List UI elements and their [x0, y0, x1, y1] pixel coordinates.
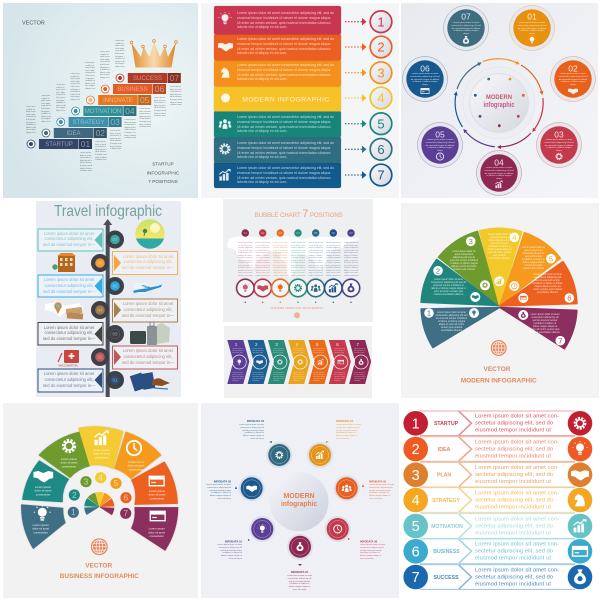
infodata labels: INFODATA 01 [225, 540, 242, 544]
row labels: BUSINESS [433, 549, 460, 555]
illustration: passports [130, 372, 170, 391]
wedge icon badges [469, 276, 528, 320]
wedge text: Lorem ipsum dolor sit amet consectetur adipiscing elit sed do eiusmod tempor incididunt ut labore et dolore magna aliqua ut enim ad minim veniam quis nostrud exercitation ullamco [436, 311, 467, 332]
numbered circles 1 to 7: 7 [377, 168, 385, 183]
small arrow marks [235, 441, 364, 566]
row lorem text: sectetur adipiscing elit, sed do [475, 549, 553, 555]
disc numbers: 03 [554, 130, 564, 140]
segment text: Lorem ipsum [35, 485, 51, 489]
caption: modern template infographic: MODERN TEMPLATE INFOGRAPHIC [270, 306, 324, 310]
segment text: dolor sit amet [128, 464, 145, 468]
chevron lorem text [232, 348, 366, 382]
chevron lorem text: Lorem ipsum dolor sit amet consectetur adipiscing elit sed do eiusmod [293, 372, 305, 382]
segment text: consectetur [94, 455, 109, 459]
segment text: dolor sit amet [32, 527, 49, 531]
panel: arc business infographic [3, 403, 198, 598]
top number bubbles: 06 [332, 231, 335, 235]
chevron numbers: 7 [357, 342, 360, 347]
top number bubbles [242, 229, 355, 237]
disc numbers: 02 [568, 64, 578, 74]
panel: numbered startup-to-success list [400, 403, 600, 598]
number badges: 7 [558, 336, 562, 345]
wedge text: Lorem ipsum dolor sit amet consectetur adipiscing elit sed do eiusmod tempor incididunt ut labore et dolore magna aliqua ut enim ad minim veniam quis nostrud [450, 250, 478, 271]
number bubbles: 1 [71, 508, 76, 517]
disc text: Lorem ipsum dolor sit amet consectetur adipiscing elit sed do eiusmod tempor incididunt ut labore et dolore magna aliqua [544, 139, 574, 152]
disc text: Lorem ipsum dolor sit amet consectetur adipiscing elit sed do eiusmod tempor incididunt ut labore et dolore magna aliqua [410, 73, 440, 86]
band text [237, 11, 335, 186]
panel: travel infographic timeline [36, 201, 181, 397]
heading: modern infographic: MODERN INFOGRAPHIC [242, 96, 329, 104]
heading: bubble chart: BUBBLE CHART 7 POSITIONS [255, 208, 343, 220]
dotted arrows [345, 18, 366, 179]
caption: vector modern infographic [461, 366, 537, 384]
chevron lorem text: Lorem ipsum dolor sit amet consectetur adip [313, 348, 325, 354]
arc segments 1 to 7 [22, 427, 178, 550]
chevron numbers: 2 [255, 342, 258, 347]
disc numbers: 06 [420, 64, 430, 74]
box text [41, 230, 176, 390]
chevron numbers: 6 [336, 342, 339, 347]
band text: Lorem ipsum dolor sit amet consectetur adipiscing elit, sed do eiusmod tempor incididunt ut labore et dolore magna aliqua. Ut enim ad minim veniam, quis nostrud exercitation ullamco laboris nisi ut aliquip ex ea com- [237, 166, 334, 184]
top number bubbles: 07 [349, 231, 353, 235]
box text: Lorem ipsum dolor sit amet consectetur adipiscing elit, sed do eiusmod tempor in— [122, 348, 174, 365]
segment text: dolor sit amet [35, 489, 52, 493]
chevron lorem text: Lorem ipsum dolor sit amet consectetur adip [334, 348, 345, 354]
centre sphere: infographic [281, 499, 317, 508]
stair steps 01 to 07: 03 [110, 117, 120, 127]
numbered circles 1 to 7: 6 [377, 142, 385, 157]
segment text: consectetur [129, 467, 143, 471]
top number bubbles: 05 [314, 231, 318, 235]
stair steps 01 to 07: 01 [81, 139, 90, 149]
caption: startup infographic 7 positions: INFOGRAPHIC [147, 170, 180, 176]
centre sphere [270, 472, 328, 531]
colour bands [214, 6, 341, 188]
illustration: map and tickets [45, 302, 83, 320]
numbered circles 1 to 7: 1 [377, 14, 385, 29]
disc numbers: 05 [435, 130, 445, 140]
icon: golden crown [130, 40, 177, 68]
illustration: vaccination kit [58, 347, 79, 368]
panel: fan diagram modern infographic [401, 203, 599, 398]
band text: Lorem ipsum dolor sit amet consectetur adipiscing elit, sed do eiusmod tempor incididunt ut labore et dolore magna aliqua. Ut enim ad minim veniam, quis nostrud exercitation ullamco laboris nisi ut aliquip ex ea com- [237, 141, 334, 159]
left number circles: 4 [412, 493, 420, 509]
segment text: dolor sit amet [93, 452, 110, 456]
row lorem text: eiusmod tempor incididunt ut [475, 479, 551, 485]
infodata text [205, 424, 395, 592]
stair steps 01 to 07: BUSINESS [117, 87, 148, 93]
row labels: STRATEGY [432, 498, 460, 504]
number badges: 2 [436, 266, 440, 275]
segment text: consectetur [36, 492, 50, 496]
illustration: airplane [133, 283, 162, 293]
heading: vector: VECTOR [22, 20, 45, 26]
disc numbers [420, 12, 578, 168]
left number circles: 1 [412, 416, 420, 432]
wedge text: Lorem ipsum dolor sit amet consectetur adipiscing elit sed do eiusmod tempor incididunt ut labore et dolore magna aliqua ut enim ad minim veniam quis nostrud [522, 246, 545, 270]
step icons [27, 74, 124, 148]
number badges: 1 [427, 309, 431, 318]
chevron lorem text: Lorem ipsum dolor sit amet consectetur adipiscing elit sed do eiusmod [334, 372, 345, 382]
chevron lorem text: Lorem ipsum dolor sit amet consectetur adipiscing elit sed do eiusmod [232, 372, 244, 382]
row outlines [420, 411, 575, 589]
infodata text: Lorem ipsum dolor sit amet consectetur adipiscing elit sed do eiusmod tempor incididunt ut labore et dolore magna aliqua ut enim ad minim [360, 544, 385, 560]
row lorem text: Lorem ipsum dolor sit amet con- [475, 414, 559, 420]
segment text: Lorem ipsum [61, 457, 77, 461]
chevron lorem text: Lorem ipsum dolor sit amet consectetur adipiscing elit sed do eiusmod [252, 372, 264, 382]
disc text: Lorem ipsum dolor sit amet consectetur adipiscing elit sed do eiusmod tempor incididunt ut labore et dolore magna aliqua [517, 22, 547, 35]
infodata labels: INFODATA 03 [247, 419, 264, 423]
timeline nodes 07 to 01: 05 [112, 284, 118, 288]
left number circles [403, 411, 428, 589]
segment text: dolor sit amet [148, 530, 165, 534]
row labels: IDEA [438, 447, 450, 453]
centre plate: infographic [484, 102, 515, 109]
row lorem text: sectetur adipiscing elit, sed do [475, 523, 553, 529]
mini fan chart [84, 492, 114, 515]
timeline nodes 07 to 01: 01 [112, 378, 118, 382]
caption: vector business infographic [60, 562, 139, 580]
row lorem text: eiusmod tempor incididunt ut [475, 428, 551, 434]
illustration: hotel [52, 253, 76, 272]
caption: vector business infographic: BUSINESS INFOGRAPHIC [60, 573, 139, 580]
chevron lorem text: Lorem ipsum dolor sit amet consectetur adip [252, 348, 264, 354]
row lorem text: Lorem ipsum dolor sit amet con- [475, 567, 559, 573]
stair steps 01 to 07: MOTIVATION [85, 109, 121, 115]
timeline nodes 07 to 01: 06 [97, 260, 103, 266]
chevron numbers: 1 [235, 342, 238, 347]
panel: orbit infographic with infodata labels [201, 403, 399, 598]
number bubbles: 6 [124, 494, 129, 503]
row lorem text [475, 414, 559, 587]
number bubbles: 7 [123, 509, 128, 518]
chevron lorem text: Lorem ipsum dolor sit amet consectetur adipiscing elit sed do eiusmod [273, 372, 284, 382]
row lorem text: eiusmod tempor incididunt ut [475, 504, 551, 510]
stair steps 01 to 07: STARTUP [45, 142, 73, 148]
row lorem text: sectetur adipiscing elit, sed do [475, 421, 553, 427]
band text: Lorem ipsum dolor sit amet consectetur adipiscing elit, sed do eiusmod tempor incididunt ut labore et dolore magna aliqua. Ut enim ad minim veniam, quis nostrud exercitation ullamco laboris nisi ut aliquip ex ea com- [237, 11, 334, 29]
illustration: luggage [130, 322, 170, 345]
panel: bubble chart 7 positions [223, 199, 373, 322]
orbit discs [239, 442, 360, 560]
row lorem text: eiusmod tempor incididunt ut [475, 581, 551, 587]
segment text: consectetur [150, 496, 164, 500]
text columns [238, 242, 358, 276]
timeline nodes 07 to 01: 04 [97, 308, 103, 312]
chevron lorem text: Lorem ipsum dolor sit amet consectetur adip [232, 348, 243, 354]
disc icons [246, 451, 352, 551]
bubble icons [241, 283, 354, 292]
segment text: Lorem ipsum [128, 460, 144, 464]
disc numbers: 04 [494, 158, 504, 168]
segment text: Lorem ipsum [94, 448, 110, 452]
stair steps 01 to 07: STRATEGY [73, 120, 104, 126]
numbered circles 1 to 7 [370, 11, 392, 186]
number badges: 3 [469, 237, 473, 246]
segment text: Lorem ipsum [149, 489, 165, 493]
row lorem text: eiusmod tempor incididunt ut [475, 530, 551, 536]
number badges: 4 [512, 233, 516, 242]
row lorem text: Lorem ipsum dolor sit amet con- [475, 439, 559, 445]
fan wedges 1 to 7 [421, 228, 577, 349]
infodata labels: INFODATA 06 [360, 540, 378, 544]
band text: Lorem ipsum dolor sit amet consectetur adipiscing elit, sed do eiusmod tempor incididunt ut labore et dolore magna aliqua. Ut enim ad minim veniam, quis nostrud exercitation ullamco laboris nisi ut aliquip ex ea com- [237, 63, 334, 81]
segment text: dolor sit amet [61, 461, 78, 465]
disc text: Lorem ipsum dolor sit amet consectetur adipiscing elit sed do eiusmod tempor incididunt ut labore et dolore magna aliqua [425, 139, 455, 152]
segment text: consectetur [149, 534, 164, 538]
centre plate: MODERN [486, 94, 512, 101]
top number bubbles: 01 [244, 231, 247, 235]
left number circles: 2 [412, 442, 420, 458]
world map [227, 236, 360, 278]
number bubbles: 2 [72, 491, 77, 500]
left number circles: 3 [412, 468, 420, 484]
row lorem text: sectetur adipiscing elit, sed do [475, 446, 553, 452]
illustration: island sun [135, 219, 165, 249]
timeline nodes 07 to 01: 02 [97, 354, 103, 360]
stair steps 01 to 07: IDEA [66, 131, 81, 137]
row labels: PLAN [437, 473, 451, 479]
timeline nodes 07 to 01: 07 [112, 237, 118, 242]
chevron rings and icons [232, 355, 368, 369]
panel: modern infographic stacked bands [201, 3, 399, 198]
band text: Lorem ipsum dolor sit amet consectetur adipiscing elit, sed do eiusmod tempor incididunt ut labore et dolore magna aliqua. Ut enim ad minim veniam, quis nostrud exercitation ullamco laboris nisi ut aliquip ex ea com- [237, 115, 334, 133]
box text: Lorem ipsum dolor sit amet consectetur adipiscing elit, sed do eiusmod tempor in— [43, 230, 95, 247]
top number bubbles: 02 [261, 231, 265, 235]
segment icons [33, 430, 166, 521]
row labels [431, 421, 463, 581]
disc text: Lorem ipsum dolor sit amet consectetur adipiscing elit sed do eiusmod tempor incididunt ut labore et dolore magna aliqua [558, 73, 588, 86]
box text: Lorem ipsum dolor sit amet consectetur adipiscing elit, sed do eiusmod tempor in— [43, 371, 95, 388]
row lorem text: sectetur adipiscing elit, sed do [475, 574, 553, 580]
disc numbers: 07 [461, 12, 471, 22]
small dots [245, 302, 352, 303]
icon: orange globe [491, 340, 507, 356]
chevron lorem text: Lorem ipsum dolor sit amet consectetur adip [293, 348, 304, 354]
disc text: Lorem ipsum dolor sit amet consectetur adipiscing elit sed do eiusmod tempor incididunt ut labore et dolore magna aliqua [484, 167, 514, 180]
chevron numbers: 5 [316, 342, 319, 347]
chevron numbers: 4 [296, 342, 299, 347]
numbered circles 1 to 7: 5 [377, 116, 385, 131]
infodata text: Lorem ipsum dolor sit amet consectetur adipiscing elit sed do eiusmod tempor incididunt ut labore et dolore magna aliqua ut enim ad minim [336, 424, 361, 440]
row lorem text: Lorem ipsum dolor sit amet con- [475, 542, 559, 548]
illustration: vaccination kit: VACCINATION [58, 364, 78, 368]
infodata text: Lorem ipsum dolor sit amet consectetur adipiscing elit sed do eiusmod tempor incididunt ut labore et dolore magna aliqua ut enim ad minim [287, 575, 312, 591]
infodata labels: INFODATA 02 [214, 480, 231, 484]
number badges: 6 [567, 294, 571, 303]
large icon bubbles [237, 279, 360, 297]
segment text: consectetur [33, 530, 48, 534]
box text: Lorem ipsum dolor sit amet consectetur adipiscing elit, sed do eiusmod tempor in— [122, 254, 174, 270]
left number circles: 5 [412, 519, 420, 535]
number bubbles: 3 [84, 478, 89, 487]
top number bubbles: 03 [279, 231, 282, 235]
box text: Lorem ipsum dolor sit amet consectetur adipiscing elit, sed do eiusmod tempor in— [122, 301, 174, 318]
stair steps 01 to 07: INNOVATE [103, 98, 133, 104]
lorem columns below steps [80, 86, 182, 171]
stair steps 01 to 07: 07 [170, 73, 179, 83]
row lorem text: sectetur adipiscing elit, sed do [475, 472, 553, 478]
disc numbers: 01 [527, 12, 537, 22]
timeline nodes 07 to 01: 03 [112, 332, 118, 336]
disc text [410, 22, 588, 180]
infodata text: Lorem ipsum dolor sit amet consectetur adipiscing elit sed do eiusmod tempor incididunt ut labore et dolore magna aliqua ut enim ad minim [369, 484, 394, 500]
stair steps 01 to 07: 05 [140, 95, 150, 105]
infodata text: Lorem ipsum dolor sit amet consectetur adipiscing elit sed do eiusmod tempor incididunt ut labore et dolore magna aliqua ut enim ad minim [217, 544, 242, 560]
panel: circular process with seven discs [401, 3, 598, 198]
row labels: SUCCESS [433, 575, 459, 581]
chevron lorem text: Lorem ipsum dolor sit amet consectetur adipiscing elit sed do eiusmod [354, 372, 366, 382]
number badges: 5 [549, 254, 553, 263]
icon: orange globe [91, 538, 108, 555]
lorem columns above steps [26, 40, 125, 135]
timeline axis arrow [103, 219, 112, 397]
wedge text: Lorem ipsum dolor sit amet consectetur adipiscing elit sed do eiusmod tempor incididunt ut labore et dolore magna aliqua ut enim ad minim veniam quis nostrud exercitation ullamco [532, 273, 563, 294]
numbered circles 1 to 7: 3 [377, 65, 385, 80]
wedge text: Lorem ipsum dolor sit amet consectetur adipiscing elit sed do eiusmod tempor incididunt ut labore et dolore magna aliqua ut enim ad minim veniam quis nostrud exercitation ullamco [431, 278, 466, 296]
infodata text: Lorem ipsum dolor sit amet consectetur adipiscing elit sed do eiusmod tempor incididunt ut labore et dolore magna aliqua ut enim ad minim [239, 424, 264, 440]
left number circles: 7 [412, 570, 420, 586]
left number circles: 6 [412, 544, 420, 560]
number bubbles [68, 472, 132, 519]
number bubbles: 5 [114, 479, 119, 488]
wedge text: Lorem ipsum dolor sit amet consectetur adipiscing elit sed do eiusmod tempor incididunt ut labore et dolore magna aliqua ut enim ad minim veniam quis nostrud exercitation ullamco [487, 233, 512, 260]
chevron numbers [235, 342, 360, 347]
numbered circles 1 to 7: 4 [377, 91, 385, 106]
row lorem text: eiusmod tempor incididunt ut [475, 556, 551, 562]
band icons [218, 12, 233, 181]
chevron lorem text: Lorem ipsum dolor sit amet consectetur adip [273, 348, 284, 354]
infodata labels: INFODATA 07 [291, 570, 309, 574]
caption: startup infographic 7 positions: 7 POSITIONS [148, 179, 178, 184]
infodata labels: INFODATA 04 [336, 419, 354, 423]
segment text: consectetur [62, 464, 76, 468]
panel: startup staircase infographic [3, 3, 198, 198]
segment text: Lorem ipsum [33, 523, 49, 527]
segment text: Lorem ipsum [149, 527, 165, 531]
chevron shapes [227, 340, 371, 384]
discs 01 to 07 [402, 6, 596, 196]
chevron lorem text: Lorem ipsum dolor sit amet consectetur adipiscing elit sed do eiusmod [313, 372, 325, 382]
disc text: Lorem ipsum dolor sit amet consectetur adipiscing elit sed do eiusmod tempor incididunt ut labore et dolore magna aliqua [451, 22, 481, 35]
caption: vector modern infographic: VECTOR [484, 366, 511, 373]
heading: travel infographic: Travel infographic [54, 203, 162, 220]
chevron numbers: 3 [275, 342, 278, 347]
row labels: MOTIVATION [431, 524, 463, 530]
row lorem text: Lorem ipsum dolor sit amet con- [475, 490, 559, 496]
ring arrows [454, 59, 544, 149]
segment text [32, 448, 166, 538]
timeline nodes 07 to 01 [91, 230, 124, 389]
infodata text: Lorem ipsum dolor sit amet consectetur adipiscing elit sed do eiusmod tempor incididunt ut labore et dolore magna aliqua ut enim ad minim [206, 484, 231, 500]
centre sphere: MODERN [283, 493, 315, 500]
caption: vector business infographic: VECTOR [85, 562, 112, 570]
box text: Lorem ipsum dolor sit amet consectetur adipiscing elit, sed do eiusmod tempor in— [43, 324, 95, 341]
stair steps 01 to 07: SUCCESS [133, 76, 162, 82]
panel: seven chevrons [224, 326, 372, 398]
wedge text: Lorem ipsum dolor sit amet consectetur adipiscing elit sed do eiusmod tempor incididunt ut labore et dolore magna aliqua ut enim ad minim veniam quis nostrud exercitation ullamco [530, 313, 560, 334]
infodata labels [214, 419, 387, 574]
number bubbles: 4 [98, 474, 103, 483]
stair steps 01 to 07 [39, 73, 181, 149]
segment text: dolor sit amet [149, 493, 166, 497]
right icon circles [568, 411, 592, 589]
wedge text [430, 233, 563, 341]
numbered circles 1 to 7: 2 [377, 40, 385, 55]
band text: Lorem ipsum dolor sit amet consectetur adipiscing elit, sed do eiusmod tempor incididunt ut labore et dolore magna aliqua. Ut enim ad minim veniam, quis nostrud exercitation ullamco laboris nisi ut aliquip ex ea com- [237, 37, 334, 55]
infodata labels: INFODATA 05 [369, 480, 387, 484]
row lorem text: Lorem ipsum dolor sit amet con- [475, 516, 559, 522]
icon: small peach globe [294, 312, 300, 318]
caption: startup infographic 7 positions: STARTUP [152, 162, 174, 166]
caption: vector modern infographic: MODERN INFOGRAPHIC [461, 377, 537, 384]
box text: Lorem ipsum dolor sit amet consectetur adipiscing elit, sed do eiusmod tempor in— [43, 277, 95, 294]
row lorem text: Lorem ipsum dolor sit amet con- [475, 465, 559, 471]
row lorem text: eiusmod tempor incididunt ut [475, 453, 551, 459]
number badges [424, 232, 574, 346]
stair steps 01 to 07: 02 [96, 128, 105, 138]
caption: startup infographic 7 positions [147, 162, 180, 184]
top number bubbles: 04 [296, 231, 300, 235]
stair steps 01 to 07: 06 [155, 84, 164, 94]
centre plate [463, 67, 535, 139]
disc icons [420, 36, 578, 188]
chevron lorem text: Lorem ipsum dolor sit amet consectetur adip [354, 348, 365, 354]
row labels: STARTUP [434, 421, 459, 427]
stair steps 01 to 07: 04 [125, 106, 135, 116]
text boxes [38, 229, 178, 392]
row lorem text: sectetur adipiscing elit, sed do [475, 497, 553, 503]
